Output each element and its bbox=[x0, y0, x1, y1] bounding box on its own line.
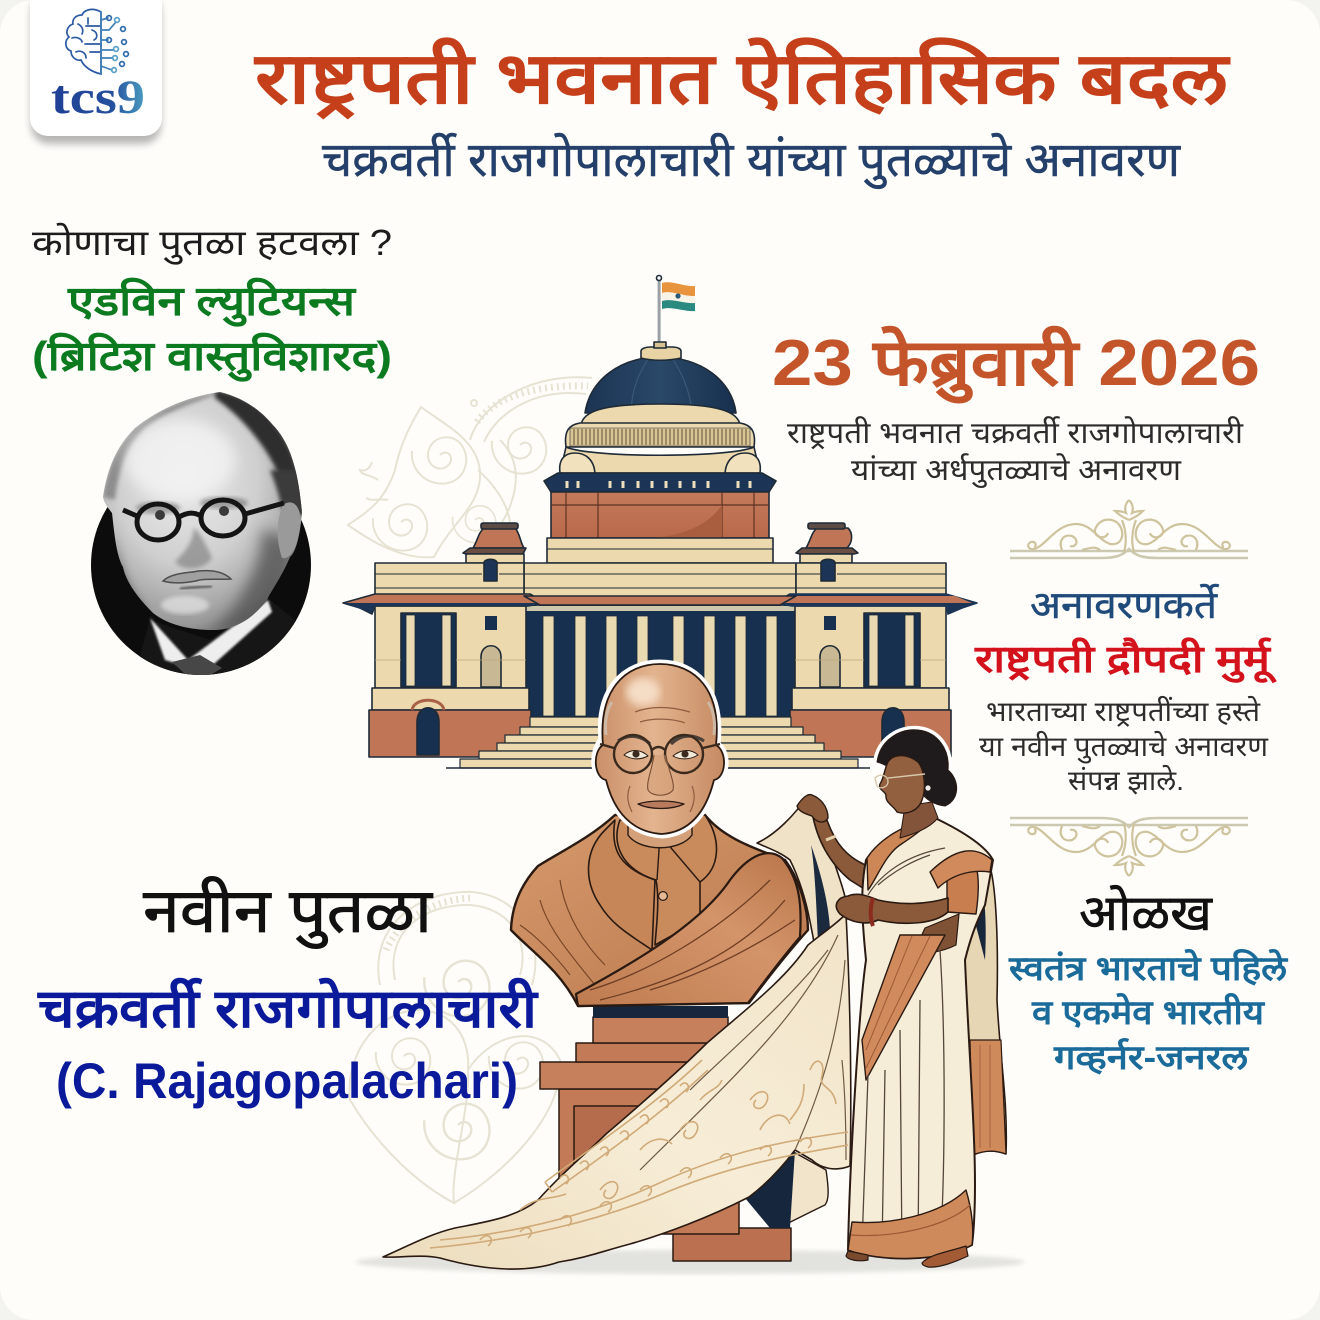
glasses bbox=[600, 735, 720, 773]
date description: यांच्या अर्धपुतळ्याचे अनावरण bbox=[851, 453, 1182, 489]
mouth bbox=[638, 801, 684, 808]
decorative mandala behind building bbox=[348, 377, 592, 557]
right wing bbox=[790, 559, 951, 757]
shawl bbox=[576, 853, 801, 1006]
midriff and lower arm bbox=[915, 914, 959, 952]
brick drum bbox=[551, 492, 769, 538]
flag bbox=[656, 276, 695, 343]
identity description bbox=[1008, 948, 1288, 1077]
glasses bbox=[123, 500, 284, 540]
hair sides bbox=[605, 702, 715, 735]
date heading: 23 फेब्रुवारी 2026 bbox=[772, 325, 1260, 404]
saree diagonal border bbox=[862, 935, 945, 1080]
head halo bbox=[596, 664, 724, 834]
shadow under cloth bbox=[745, 1150, 795, 1228]
ornament: lower divider bbox=[1010, 818, 1248, 876]
ornament: upper divider bbox=[1010, 500, 1248, 558]
neck and face bbox=[900, 802, 938, 838]
portrait: Edwin Lutyens bbox=[91, 390, 320, 690]
name in English: (C. Rajagopalachari) bbox=[56, 1053, 518, 1109]
building: Rashtrapati Bhavan bbox=[343, 276, 977, 768]
saree bottom border bbox=[848, 1190, 973, 1258]
unveiling description: या नवीन पुतळ्याचे अनावरण bbox=[979, 730, 1269, 764]
logo wordmark: tcs9 bbox=[51, 71, 145, 124]
heading: new statue: नवीन पुतळा bbox=[143, 876, 433, 949]
date description: राष्ट्रपती भवनात चक्रवर्ती राजगोपालाचारी bbox=[787, 416, 1244, 450]
nose bbox=[648, 755, 673, 795]
heading: identity: ओळख bbox=[1079, 885, 1213, 941]
main cloth bbox=[383, 914, 851, 1269]
logo card bbox=[30, 0, 162, 144]
torso folds bbox=[520, 880, 605, 985]
woman glasses bbox=[875, 774, 925, 788]
panel: removed statue bbox=[32, 222, 392, 690]
rear cloth fold bbox=[782, 1150, 828, 1226]
eyebrows bbox=[618, 736, 704, 744]
subtitle: चक्रवर्ती राजगोपालाचारी यांच्या पुतळ्याचे अनावरण bbox=[322, 132, 1181, 189]
kurta collar bbox=[617, 815, 716, 945]
woman: President unveiling statue bbox=[797, 730, 1006, 1267]
date description bbox=[787, 416, 1244, 489]
neck bbox=[628, 805, 692, 848]
pedestal bbox=[540, 1006, 791, 1261]
left wing bbox=[369, 559, 531, 757]
icon: circuit brain bbox=[66, 9, 128, 74]
saree pleats bbox=[862, 950, 944, 1255]
eyes bbox=[624, 751, 698, 759]
hair bbox=[877, 730, 957, 806]
blouse bbox=[867, 820, 926, 890]
raised cloth flap bbox=[757, 795, 848, 948]
role: British architect: (ब्रिटिश वास्तुविशारद) bbox=[32, 332, 392, 382]
name: Edwin Lutyens: एडविन ल्युटियन्स bbox=[67, 277, 356, 327]
roof eaves bbox=[343, 594, 977, 614]
cloth drape bbox=[383, 795, 851, 1269]
cloth folds bbox=[640, 935, 846, 1170]
drum colonnade bbox=[560, 404, 760, 473]
unveiling description: भारताच्या राष्ट्रपतींच्या हस्ते bbox=[986, 695, 1261, 727]
unveiling description bbox=[979, 695, 1269, 796]
cloth embroidered border bbox=[430, 1060, 848, 1248]
decorative mandala behind new statue title bbox=[350, 892, 560, 1203]
title: राष्ट्रपती भवनात ऐतिहासिक बदल bbox=[253, 37, 1231, 120]
feet bbox=[846, 1251, 868, 1261]
ground shadow bbox=[355, 1250, 1025, 1274]
raised arm bbox=[812, 805, 868, 890]
dome bbox=[585, 342, 736, 413]
name: Chakravarti Rajagopalachari: चक्रवर्ती राजगोपालाचारी bbox=[37, 977, 539, 1039]
heading: unveiled by: अनावरणकर्ते bbox=[1030, 583, 1219, 627]
navy eave band bbox=[544, 473, 776, 492]
head bbox=[596, 664, 724, 834]
heading: whose statue removed: कोणाचा पुतळा हटवला ? bbox=[32, 222, 392, 265]
central pavilion bbox=[524, 563, 796, 718]
stairs bbox=[446, 717, 870, 768]
cream base bbox=[547, 538, 773, 563]
torso bbox=[511, 815, 808, 1006]
identity description: व एकमेव भारतीय bbox=[1031, 992, 1265, 1032]
statue: bust of C. Rajagopalachari bbox=[511, 664, 808, 1261]
identity description: गव्हर्नर-जनरल bbox=[1053, 1037, 1249, 1077]
left turret bbox=[463, 523, 526, 563]
name: President Droupadi Murmu: राष्ट्रपती द्रौपदी मुर्मू bbox=[974, 637, 1277, 684]
forehead wrinkles bbox=[635, 708, 690, 723]
identity description: स्वतंत्र भारताचे पहिले bbox=[1008, 948, 1288, 988]
saree body bbox=[848, 818, 993, 1258]
right turret bbox=[796, 523, 858, 563]
pallu back bbox=[960, 855, 1006, 1155]
moustache bbox=[163, 571, 231, 583]
unveiling description: संपन्न झाले. bbox=[1068, 764, 1184, 796]
